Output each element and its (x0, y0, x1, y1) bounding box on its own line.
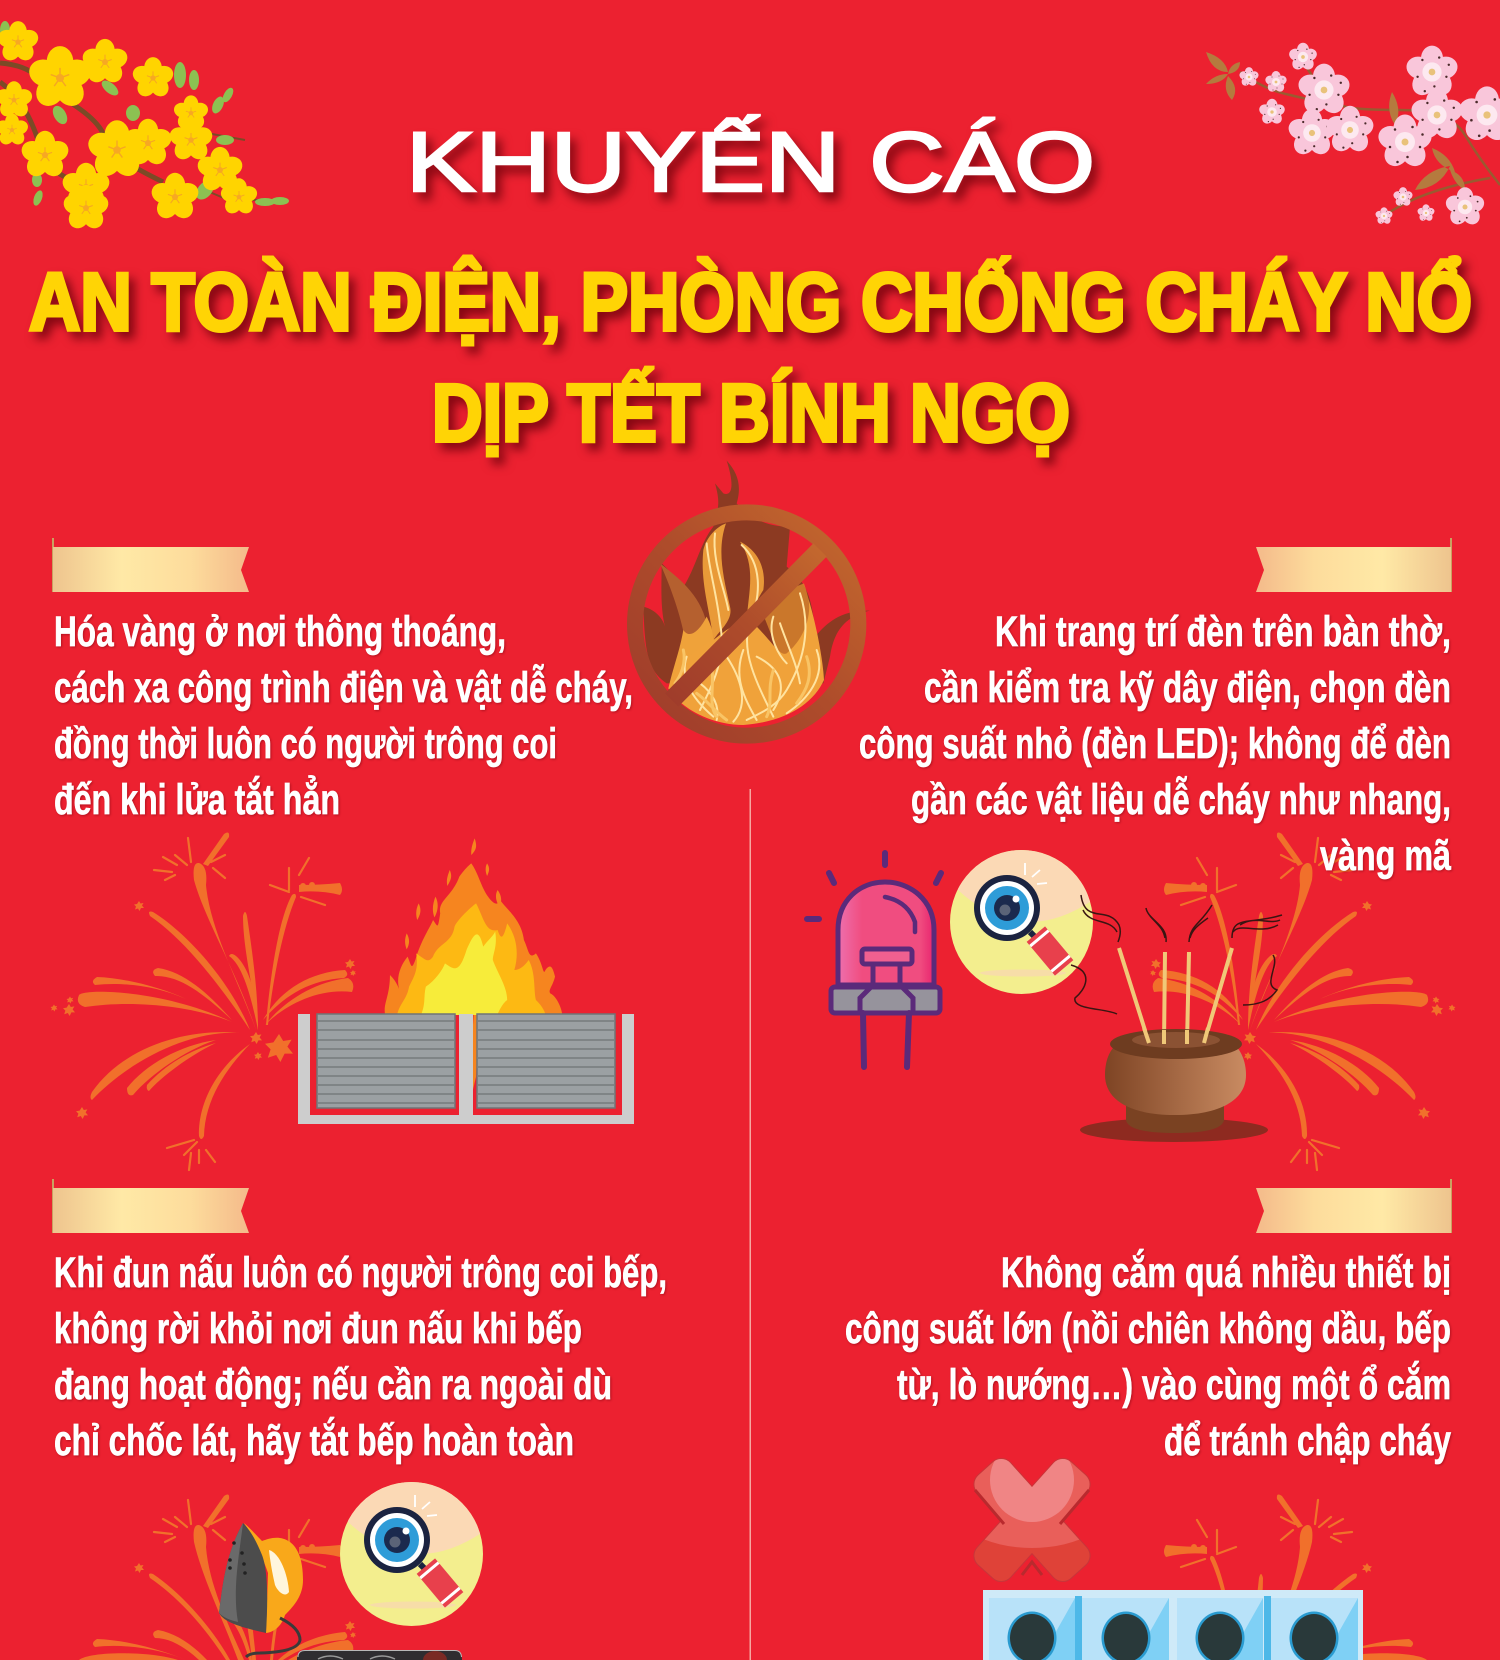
icon: led bulb (807, 853, 961, 1067)
icon: incense pot (1071, 895, 1282, 1142)
text block: trang trí đèn (859, 608, 1452, 880)
icon: induction stove (297, 1650, 462, 1660)
text block: đun nấu: đang hoạt động; nếu cần ra ngoài dù (54, 1361, 612, 1409)
icon: electric iron (219, 1523, 303, 1657)
fireworks: row 1 left (50, 833, 356, 1170)
icon: red cross (974, 1458, 1090, 1582)
apricot blossom branch, top left (0, 21, 289, 232)
icon: power strip (983, 1590, 1363, 1660)
fireworks: row 1 right (1150, 833, 1456, 1170)
text block: hóa vàng: Hóa vàng ở nơi thông thoáng, (54, 608, 506, 656)
text block: hóa vàng (54, 608, 633, 824)
ribbon: row 2 left (52, 1179, 249, 1233)
text block: ổ cắm (845, 1248, 1451, 1465)
text block: đun nấu: không rời khỏi nơi đun nấu khi bếp (54, 1305, 582, 1353)
text block: đun nấu: chỉ chốc lát, hãy tắt bếp hoàn toàn (54, 1416, 574, 1465)
text block: hóa vàng: đến khi lửa tắt hẳn (54, 774, 340, 824)
fireworks: row 2 left (79, 1495, 356, 1660)
text block: hóa vàng: cách xa công trình điện và vật dễ cháy, (54, 663, 633, 712)
fireworks: row 2 right (1150, 1495, 1427, 1660)
text block: đun nấu: Khi đun nấu luôn có người trông coi bếp, (54, 1249, 667, 1297)
ribbon: row 1 left (52, 538, 249, 592)
title: khuyến cáo: KHUYẾN CÁO (406, 115, 1095, 209)
text block: trang trí đèn: vàng mã (1320, 832, 1452, 880)
icon: no fire sign (635, 461, 870, 736)
ribbon: row 1 right (1256, 538, 1452, 592)
ribbon: row 2 right (1256, 1179, 1452, 1233)
icon: inspection magnifier, row 2 (340, 1482, 483, 1626)
icon: inspection magnifier, row 1 (950, 850, 1093, 994)
icon: burning grate (298, 838, 634, 1124)
peach blossom branch, top right (1206, 43, 1500, 228)
text block: đun nấu (54, 1249, 667, 1465)
text block: hóa vàng: đồng thời luôn có người trông coi (54, 720, 557, 768)
center divider (750, 789, 751, 1660)
title: dịp tết bính ngọ: DỊP TẾT BÍNH NGỌ (432, 368, 1070, 459)
